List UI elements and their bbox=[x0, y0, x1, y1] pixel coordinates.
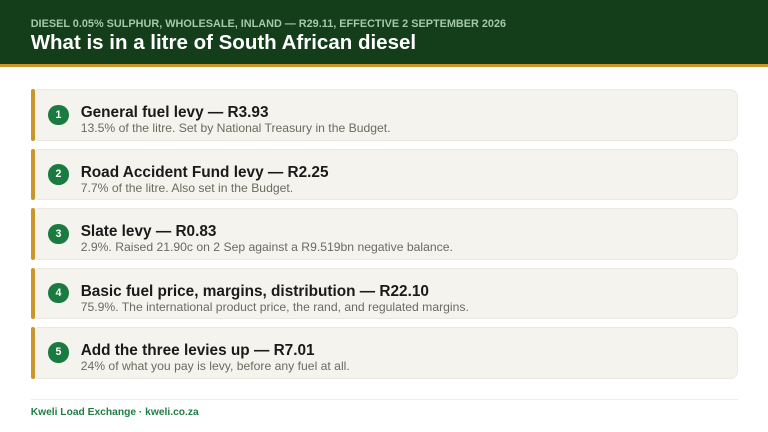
number badge 1: 1 bbox=[56, 109, 61, 121]
number badge 3 bbox=[48, 224, 69, 244]
accent bar bbox=[31, 89, 35, 141]
number badge 5: 5 bbox=[56, 346, 61, 358]
accent bar bbox=[31, 149, 35, 200]
title: What is in a litre of South African diesel bbox=[31, 31, 416, 54]
number badge 1 bbox=[48, 105, 69, 125]
card heading: Add the three levies up — R7.01 bbox=[81, 342, 315, 359]
card description: 2.9%. Raised 21.90c on 2 Sep against a R9.519bn negative balance. bbox=[81, 240, 453, 254]
card description: 13.5% of the litre. Set by National Treasury in the Budget. bbox=[81, 121, 391, 135]
header banner bbox=[0, 0, 768, 67]
number badge 5 bbox=[48, 342, 69, 363]
panel: basic fuel price bbox=[31, 268, 738, 319]
number badge 4 bbox=[48, 283, 69, 303]
card description: 75.9%. The international product price, the rand, and regulated margins. bbox=[81, 300, 469, 314]
number badge 2: 2 bbox=[56, 168, 61, 180]
panel: road accident fund levy bbox=[31, 149, 738, 200]
footer: Kweli Load Exchange · kweli.co.za bbox=[31, 407, 199, 418]
accent bar bbox=[31, 327, 35, 379]
kicker line: DIESEL 0.05% SULPHUR, WHOLESALE, INLAND — R29.11, EFFECTIVE 2 SEPTEMBER 2026 bbox=[31, 18, 506, 30]
card heading: Road Accident Fund levy — R2.25 bbox=[81, 164, 328, 181]
card description: 24% of what you pay is levy, before any fuel at all. bbox=[81, 359, 350, 373]
number badge 3: 3 bbox=[56, 228, 61, 240]
card description: 7.7% of the litre. Also set in the Budget. bbox=[81, 181, 293, 195]
panel: general fuel levy bbox=[31, 89, 738, 141]
number badge 4: 4 bbox=[56, 287, 61, 299]
accent bar bbox=[31, 208, 35, 260]
number badge 2 bbox=[48, 164, 69, 185]
card heading: Slate levy — R0.83 bbox=[81, 223, 216, 240]
panel: levy total bbox=[31, 327, 738, 379]
accent bar bbox=[31, 268, 35, 319]
card heading: Basic fuel price, margins, distribution — R22.10 bbox=[81, 283, 429, 300]
panel: slate levy bbox=[31, 208, 738, 260]
card heading: General fuel levy — R3.93 bbox=[81, 104, 269, 121]
